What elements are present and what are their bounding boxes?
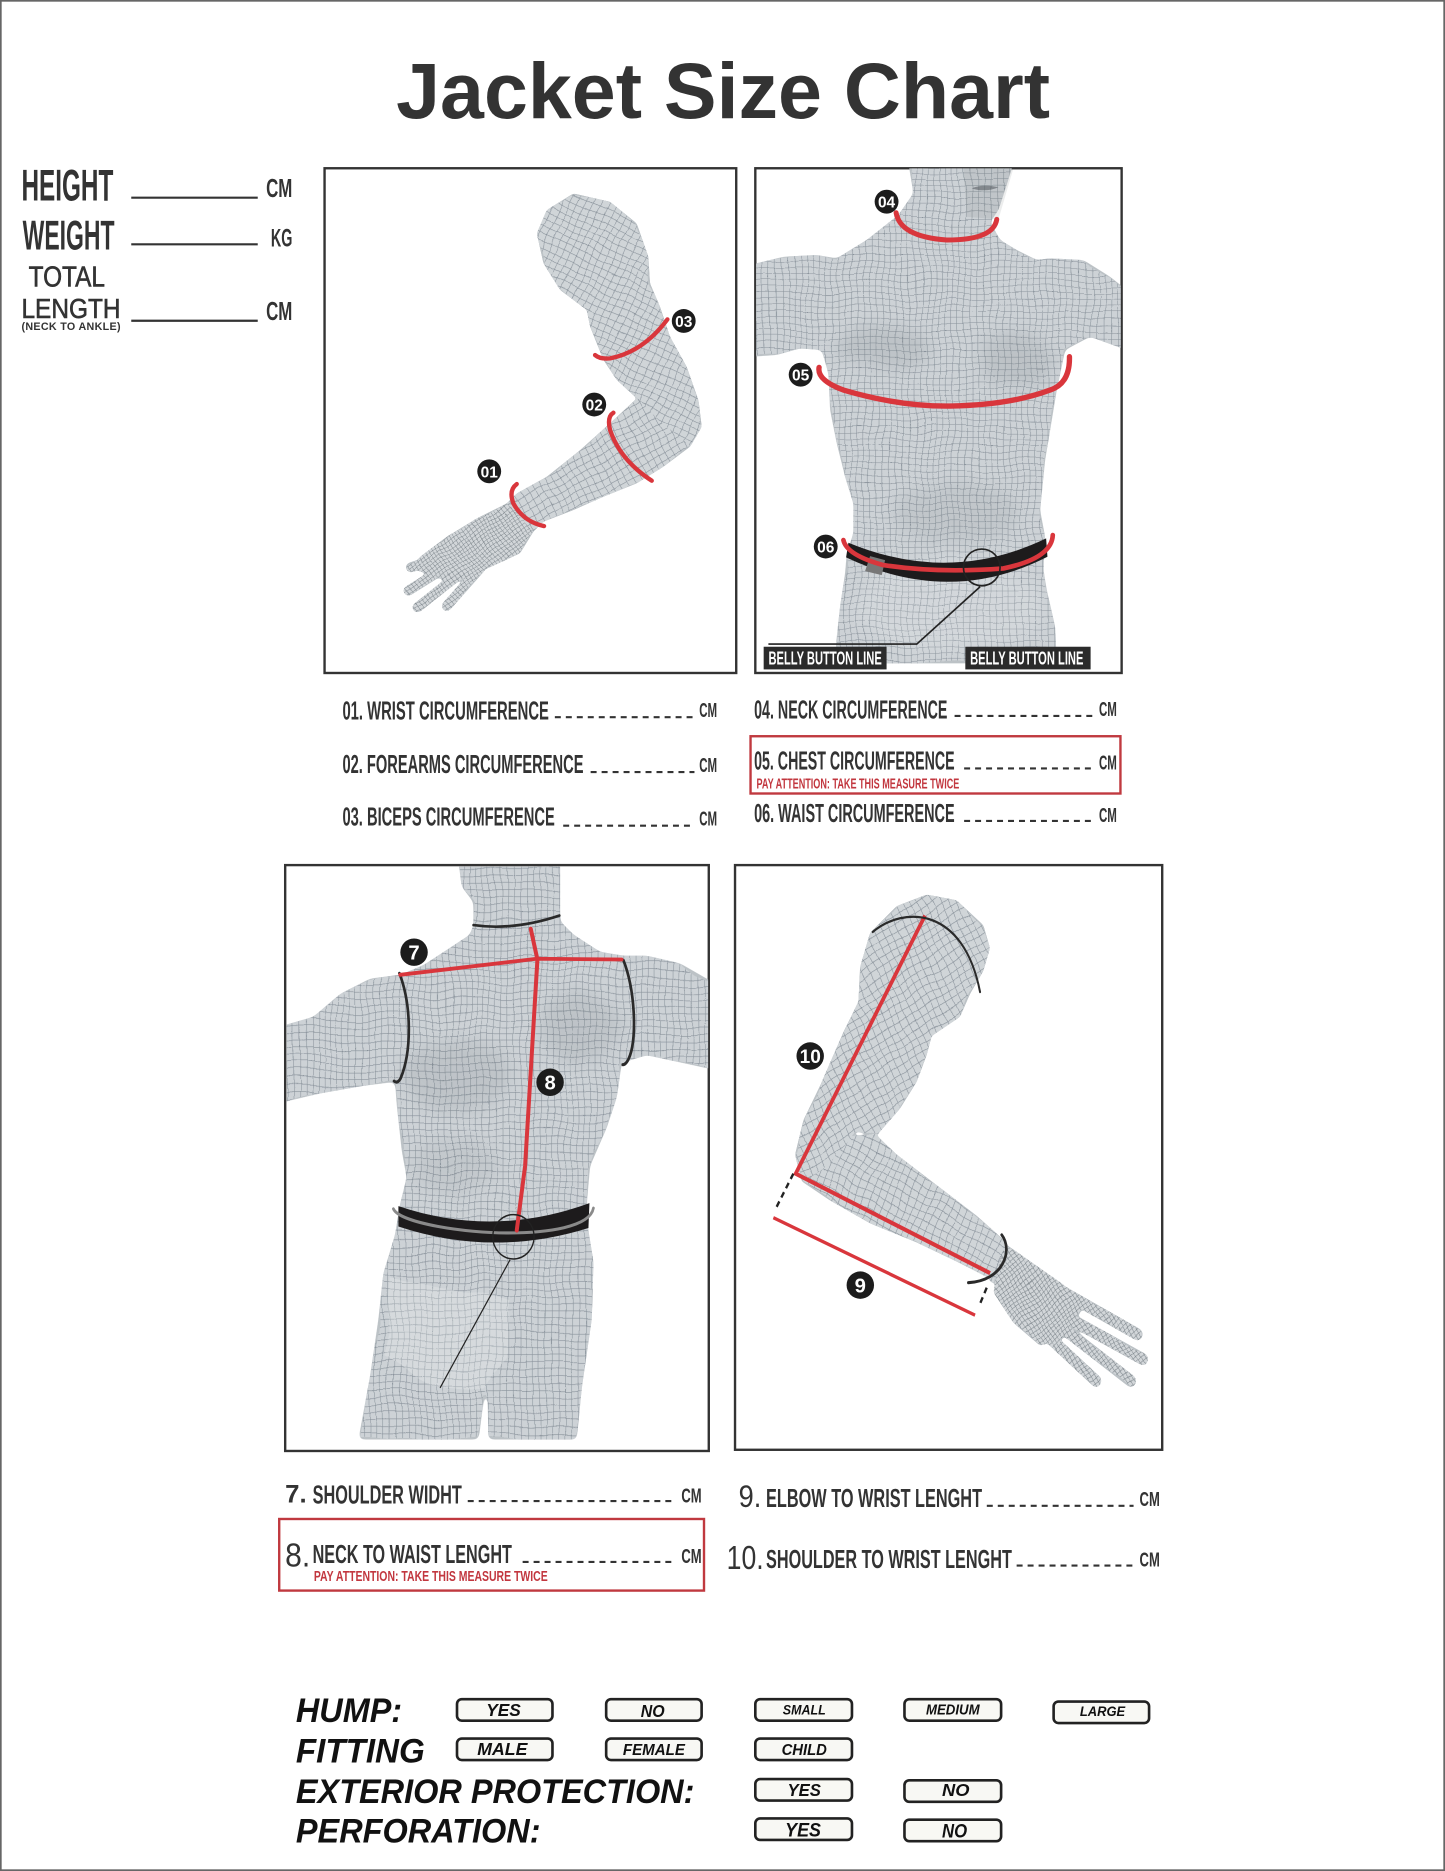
measurement list: arm	[342, 696, 717, 832]
fitting row: FEMALE	[623, 1742, 686, 1759]
badge 7: 7	[408, 942, 420, 964]
weight field: KG	[271, 225, 292, 253]
row 9: 9.	[739, 1479, 761, 1514]
exterior protection row: NO	[942, 1780, 970, 1800]
row 8 callout: CM	[681, 1546, 702, 1568]
badge 05: 05	[792, 368, 810, 385]
panel: arm circumference	[325, 168, 736, 673]
row 01: 01. WRIST CIRCUMFERENCE	[342, 696, 549, 726]
row 8 callout: NECK TO WAIST LENGHT	[313, 1539, 512, 1569]
hump row: MEDIUM	[926, 1703, 981, 1719]
row 01: CM	[699, 700, 717, 722]
row 10: CM	[1140, 1550, 1160, 1572]
fitting row: FITTING	[296, 1732, 425, 1770]
badge 02	[582, 393, 606, 416]
row 7: CM	[681, 1485, 702, 1507]
row 04: CM	[1099, 699, 1117, 721]
options table	[296, 1692, 1149, 1850]
perforation row: YES	[785, 1820, 821, 1841]
belly button label right: BELLY BUTTON LINE	[970, 648, 1083, 669]
row 05 callout: 05. CHEST CIRCUMFERENCE	[754, 746, 955, 776]
hump row: LARGE	[1080, 1704, 1126, 1719]
body stats panel	[21, 161, 292, 333]
hump row: SMALL	[783, 1703, 826, 1718]
row 10: 10.	[727, 1540, 764, 1577]
row 7: SHOULDER WIDHT	[313, 1479, 462, 1509]
measurement list: torso	[751, 694, 1120, 828]
hump row: NO	[641, 1701, 665, 1721]
torso figure with measure bands	[750, 153, 1127, 663]
badge 01: 01	[481, 464, 498, 481]
row 7: 7.	[285, 1480, 307, 1508]
panel: arm length	[735, 865, 1162, 1450]
badge 01	[477, 459, 501, 483]
row 9: CM	[1140, 1489, 1160, 1511]
row 10: SHOULDER TO WRIST LENGHT	[766, 1544, 1012, 1574]
row 8 callout: PAY ATTENTION: TAKE THIS MEASURE TWICE	[314, 1569, 548, 1585]
panel: torso front	[750, 153, 1127, 673]
badge 9	[847, 1271, 874, 1299]
badge 9: 9	[855, 1275, 866, 1297]
badge 06	[814, 535, 838, 558]
total length field: TOTAL	[29, 261, 105, 293]
weight field: WEIGHT	[23, 211, 115, 258]
height field	[21, 161, 292, 210]
row 9: ELBOW TO WRIST LENGHT	[766, 1483, 982, 1513]
badge 10: 10	[800, 1047, 821, 1068]
row 03: CM	[699, 809, 717, 831]
panel: back view	[280, 849, 713, 1451]
perforation row	[296, 1812, 1001, 1850]
badge 04: 04	[878, 195, 896, 212]
hump row	[296, 1692, 1149, 1730]
title: Jacket Size Chart	[396, 47, 1050, 135]
exterior protection row	[296, 1773, 1001, 1811]
weight field	[23, 211, 292, 258]
badge 10	[796, 1042, 824, 1070]
badge 03: 03	[675, 314, 693, 331]
exterior protection row: EXTERIOR PROTECTION:	[296, 1773, 694, 1811]
badge 06: 06	[817, 539, 835, 556]
total length field: LENGTH	[21, 293, 121, 324]
fitting row: MALE	[477, 1739, 528, 1759]
exterior protection row: YES	[788, 1780, 821, 1800]
hump row: HUMP:	[296, 1692, 402, 1730]
row 02: CM	[699, 755, 717, 777]
back figure with measure lines	[280, 849, 713, 1439]
total length field: (NECK TO ANKLE)	[21, 321, 121, 333]
height field: CM	[266, 173, 292, 203]
measurement list: back	[279, 1479, 704, 1591]
row 06: 06. WAIST CIRCUMFERENCE	[754, 798, 955, 828]
badge 8	[536, 1069, 564, 1096]
belly button label left: BELLY BUTTON LINE	[768, 648, 882, 669]
row 05 callout: CM	[1099, 753, 1117, 775]
row 05 callout: PAY ATTENTION: TAKE THIS MEASURE TWICE	[757, 777, 959, 793]
row 04: 04. NECK CIRCUMFERENCE	[754, 694, 947, 724]
belly button label right	[965, 647, 1091, 669]
badge 05	[789, 363, 813, 387]
total length field: CM	[266, 296, 292, 326]
belly button label left	[764, 647, 887, 669]
badge 03	[672, 309, 696, 333]
fitting row: CHILD	[782, 1742, 827, 1759]
row 8 callout	[279, 1519, 704, 1591]
measurement list: arm length	[727, 1479, 1160, 1577]
arm figure with measure bands	[408, 193, 702, 607]
row 8 callout: 8.	[285, 1538, 310, 1575]
height field: HEIGHT	[21, 161, 113, 210]
total length field	[21, 261, 292, 333]
badge 7	[400, 938, 428, 966]
row 05 callout	[751, 736, 1120, 794]
perforation row: PERFORATION:	[296, 1812, 541, 1850]
row 03: 03. BICEPS CIRCUMFERENCE	[342, 802, 555, 832]
row 06: CM	[1099, 805, 1117, 827]
badge 8: 8	[544, 1072, 556, 1094]
row 02: 02. FOREARMS CIRCUMFERENCE	[342, 749, 583, 779]
hump row: YES	[486, 1700, 521, 1720]
perforation row: NO	[942, 1822, 967, 1843]
badge 02: 02	[586, 397, 603, 414]
row 7	[285, 1479, 702, 1509]
fitting row	[296, 1732, 852, 1770]
badge 04	[875, 190, 899, 214]
arm length figure with measure lines	[773, 895, 1143, 1381]
